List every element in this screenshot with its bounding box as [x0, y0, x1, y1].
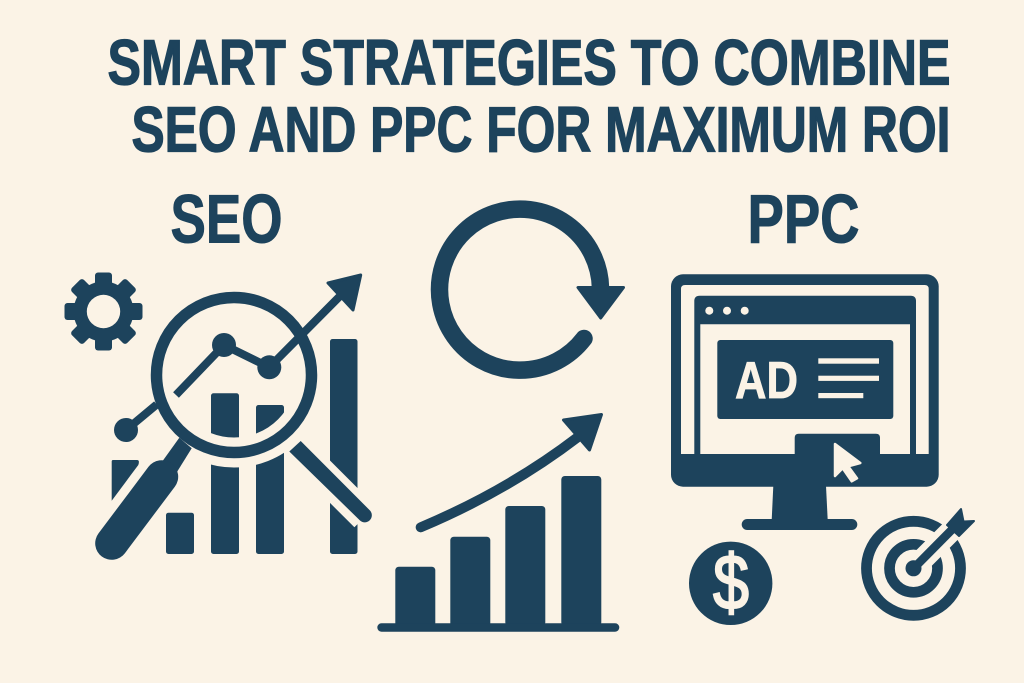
heading: PPC: PPC — [748, 180, 860, 258]
magnifier gap halo — [156, 298, 312, 452]
icon: monitor — [671, 274, 939, 530]
icon: target with arrow — [866, 509, 974, 615]
ad banner: AD — [735, 352, 798, 410]
heading: SEO: SEO — [170, 180, 282, 258]
icon: dollar coin — [689, 538, 772, 626]
diagonal trend line — [289, 441, 372, 522]
title — [108, 26, 950, 166]
icon: cursor — [835, 444, 860, 481]
ad banner — [717, 340, 893, 419]
magnifying glass — [112, 298, 312, 543]
icon: dollar coin: $ — [713, 538, 749, 626]
panel: SEO illustration — [64, 272, 372, 554]
browser dots — [705, 307, 749, 315]
diagonal line gap halo — [295, 447, 365, 517]
panel: PPC illustration — [671, 274, 974, 626]
line chart with arrow — [114, 275, 361, 442]
click tab — [795, 434, 880, 456]
chart: rising bars with arrow — [377, 414, 619, 632]
icon: circular arrow — [440, 209, 624, 370]
bar chart behind magnifier — [112, 339, 358, 554]
icon: gear — [64, 272, 142, 350]
